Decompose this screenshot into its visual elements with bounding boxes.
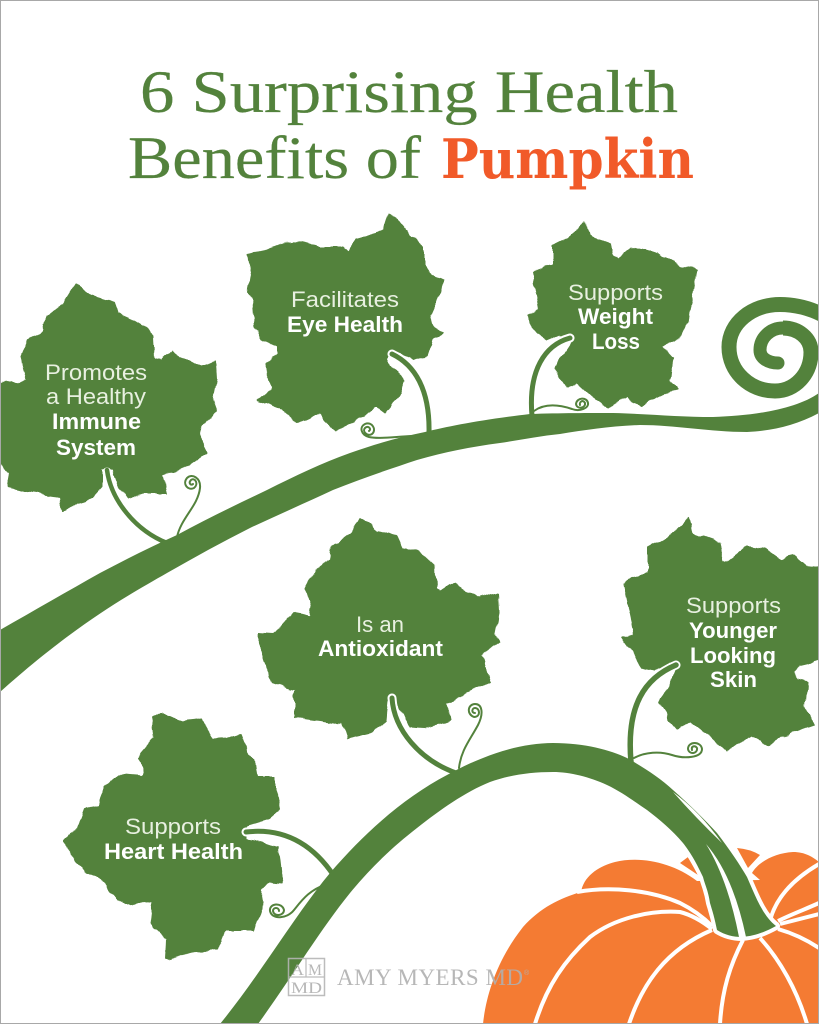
logo: amy myers md bbox=[288, 958, 530, 997]
logo: amy myers md: ® bbox=[524, 969, 530, 977]
title: 6 Surprising Health bbox=[140, 59, 678, 125]
spiral inner tail bbox=[760, 328, 783, 363]
logo monogram box: MD bbox=[291, 980, 322, 997]
text: supports weight loss: Weight bbox=[578, 304, 654, 329]
text: supports weight loss: Loss bbox=[592, 329, 640, 354]
text: supports younger looking skin: Skin bbox=[710, 667, 757, 692]
stem highlights bbox=[673, 792, 722, 843]
leaf: weight loss bbox=[528, 223, 697, 407]
text: is an antioxidant: Is an bbox=[356, 612, 404, 637]
text: supports younger looking skin: Younger bbox=[689, 618, 777, 643]
pumpkin bbox=[483, 848, 819, 1024]
text: facilitates eye health bbox=[287, 287, 403, 337]
text: supports heart health: Supports bbox=[125, 814, 221, 839]
text: supports heart health: Heart Health bbox=[104, 839, 243, 864]
logo monogram box: M bbox=[308, 962, 322, 979]
text: supports younger looking skin: Supports bbox=[686, 593, 781, 618]
text: supports heart health bbox=[104, 814, 243, 864]
leaf: heart health bbox=[63, 715, 282, 959]
white halo around stem bbox=[683, 833, 776, 937]
text: promotes a healthy immune system: a Healthy bbox=[46, 384, 146, 409]
text: is an antioxidant: Antioxidant bbox=[318, 636, 444, 661]
pumpkin rib lines bbox=[535, 864, 819, 1024]
text: supports weight loss bbox=[568, 280, 663, 354]
curled tendrils bbox=[177, 399, 702, 917]
pumpkin body bbox=[483, 852, 819, 1024]
text: supports weight loss: Supports bbox=[568, 280, 663, 305]
logo monogram box: A bbox=[291, 962, 304, 979]
leaf: antioxidant bbox=[258, 517, 500, 739]
text: promotes a healthy immune system: Promotes bbox=[45, 360, 147, 385]
upper vine with spiral bbox=[0, 304, 819, 692]
title: Benefits of bbox=[128, 125, 421, 191]
text: facilitates eye health: Eye Health bbox=[287, 312, 403, 337]
logo wordmark: AMY MYERS MD bbox=[337, 965, 523, 990]
text: facilitates eye health: Facilitates bbox=[291, 287, 399, 312]
spiral curl bbox=[729, 304, 819, 391]
text: is an antioxidant bbox=[318, 612, 444, 661]
title: Pumpkin bbox=[441, 127, 694, 191]
text: promotes a healthy immune system bbox=[45, 360, 147, 460]
text: supports younger looking skin: Looking bbox=[690, 643, 776, 668]
pumpkin small back pieces bbox=[680, 848, 760, 875]
leaf: younger looking skin bbox=[622, 518, 819, 752]
text: promotes a healthy immune system: Immune bbox=[52, 409, 141, 434]
logo monogram box bbox=[288, 958, 324, 997]
text: promotes a healthy immune system: System bbox=[56, 435, 136, 460]
text: supports younger looking skin bbox=[686, 593, 781, 692]
leaf stems bbox=[107, 338, 676, 876]
leaf: immune system bbox=[0, 284, 217, 512]
leaf: eye health bbox=[248, 214, 444, 431]
lower vine leading to pumpkin stem bbox=[220, 743, 776, 1024]
title bbox=[128, 59, 694, 191]
